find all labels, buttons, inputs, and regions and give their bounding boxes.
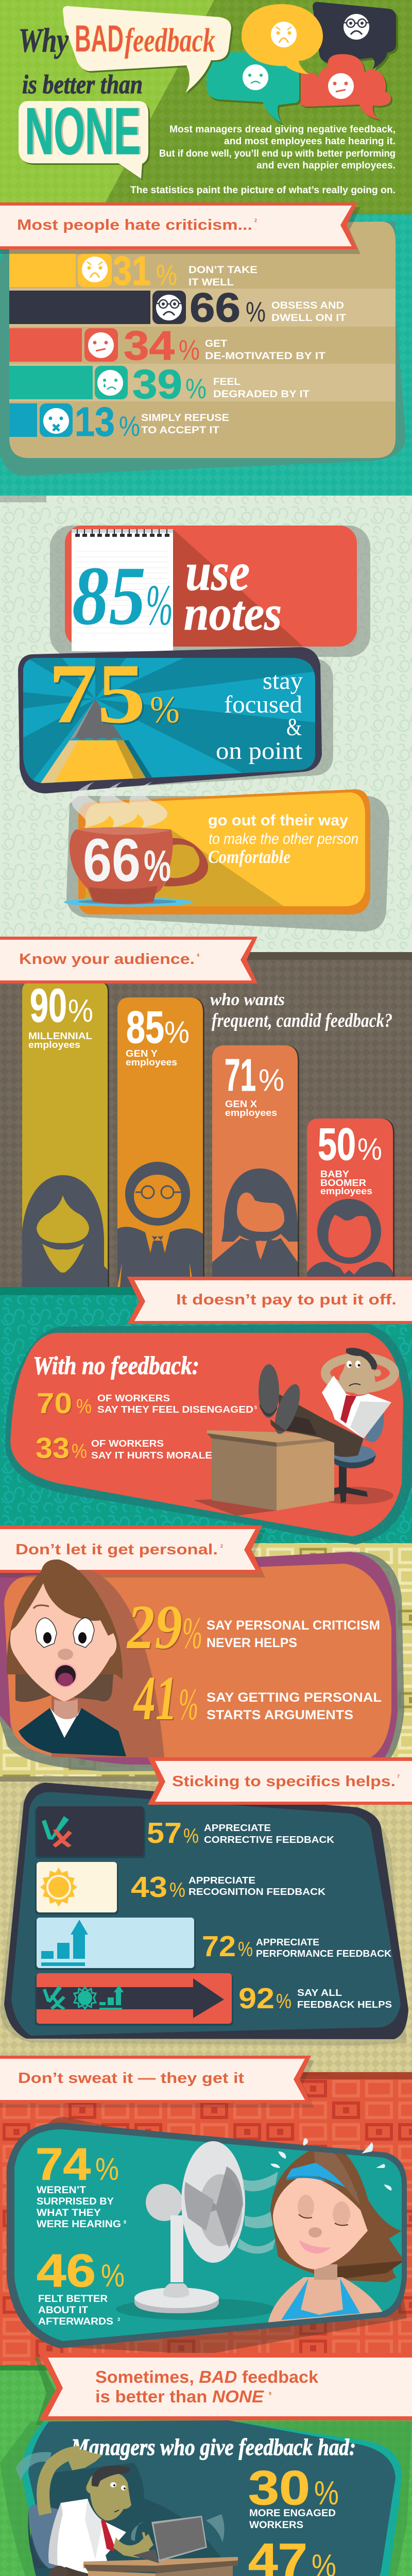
- row: 34 percent: [9, 323, 325, 368]
- column: gen x: [212, 1045, 299, 1287]
- title: BAD: [75, 18, 124, 60]
- section background: pale wallpaper: [0, 496, 412, 953]
- intro text: [130, 124, 396, 196]
- stat: 85 percent: 85: [72, 550, 146, 642]
- text: use notes: notes: [184, 586, 282, 640]
- stat: 30 percent: %: [314, 2474, 339, 2512]
- column: baby boomer: [307, 1118, 394, 1287]
- row: 31 percent: [9, 248, 258, 294]
- row: all feedback helps: FEEDBACK HELPS: [297, 1999, 392, 2010]
- banner: it doesn't pay to put it off: It doesn’t pay to put it off.: [176, 1292, 397, 1308]
- row: 39 percent: FEEL: [213, 377, 241, 387]
- stats: personal criticism: [126, 1592, 382, 1734]
- column: gen y: 85: [126, 1002, 164, 1053]
- stat: 46 percent: FELT BETTER: [38, 2294, 108, 2304]
- icon: teal bubble with sad face: [207, 52, 301, 126]
- row: corrective feedback: 57: [147, 1817, 182, 1850]
- stat: 74 percent: 8: [124, 2219, 126, 2225]
- column: millennial: %: [68, 993, 93, 1029]
- text: use notes: [184, 541, 282, 640]
- section background: header green: [0, 0, 412, 310]
- panel: 85 percent use notes: [50, 526, 370, 657]
- stat: 30 percent: MORE ENGAGED: [249, 2508, 336, 2519]
- row: 34 percent: GET: [205, 338, 227, 349]
- stat: 41 percent: SAY GETTING PERSONAL: [207, 1690, 382, 1705]
- panel: criticism statistics: [0, 222, 406, 476]
- row: 39 percent: %: [185, 372, 207, 404]
- icon: pencil: [41, 699, 152, 783]
- stat: 75 percent: %: [150, 689, 180, 731]
- banner: don't sweat it: [0, 2056, 314, 2108]
- row: all feedback helps: [35, 1973, 392, 2026]
- banner: don't let it get personal: Don’t let it get personal.: [15, 1541, 218, 1558]
- column: millennial: MILLENNIAL: [28, 1031, 92, 1041]
- column: gen y: employees: [126, 1057, 177, 1067]
- text: stay focused and on point: stay: [263, 667, 303, 694]
- column: gen y: %: [164, 1015, 190, 1049]
- banner: it doesn't pay to put it off: [127, 1277, 412, 1324]
- intro text: The statistics paint the picture of what’s really going on.: [130, 185, 396, 196]
- stat: 41 percent: 41: [133, 1664, 177, 1733]
- stat: 74 percent: [36, 2139, 126, 2230]
- panel: managers who give feedback: [0, 2420, 412, 2576]
- banner: sticking to specifics: [148, 1757, 412, 1805]
- column: baby boomer: BABY: [320, 1169, 349, 1179]
- stat: 74 percent: WEREN’T: [37, 2185, 86, 2196]
- stat: 74 percent: SURPRISED BY: [37, 2196, 114, 2207]
- row: recognition feedback: APPRECIATE: [188, 1875, 255, 1886]
- row: 13 percent: TO ACCEPT IT: [141, 425, 219, 436]
- title bubble: NONE: [19, 94, 150, 180]
- panel: 66 percent go out of their way: [64, 782, 389, 931]
- section background: brown: [0, 952, 412, 1288]
- row: 66 percent: OBSESS AND: [271, 300, 344, 311]
- row: recognition feedback: 43: [131, 1871, 167, 1904]
- stat: 46 percent: 3: [117, 2317, 120, 2322]
- row: corrective feedback: %: [183, 1825, 199, 1848]
- stat: 46 percent: %: [101, 2258, 125, 2294]
- illustration: man at laptop: [15, 2449, 253, 2576]
- banner: know your audience: 4: [197, 953, 199, 958]
- stat: 41 percent: 41: [134, 1665, 178, 1734]
- row: 31 percent: DON’T TAKE: [188, 265, 258, 276]
- stat: 29 percent: [126, 1592, 380, 1663]
- row: 66 percent: 66: [190, 284, 241, 330]
- banner: sticking to specifics: 7: [397, 1774, 400, 1779]
- row: performance feedback: %: [238, 1938, 253, 1961]
- stat: 29 percent: NEVER HELPS: [207, 1636, 297, 1650]
- title bubble: cream: [63, 6, 233, 94]
- banner: sometimes bad feedback: 9: [269, 2391, 271, 2396]
- row: all feedback helps: %: [276, 1990, 291, 2013]
- column: baby boomer: %: [357, 1132, 382, 1166]
- row: 13 percent: %: [119, 410, 140, 442]
- heading: who wants frequent candid feedback: [210, 990, 392, 1031]
- text: go out of their way: to make the other person: [209, 831, 358, 848]
- row: 39 percent: [9, 361, 310, 407]
- banner: know your audience: [0, 937, 258, 984]
- stat: 46 percent: AFTERWARDS: [38, 2316, 113, 2327]
- section background: yellow squares: [0, 1543, 412, 1777]
- section background: teal criticism: [0, 214, 412, 497]
- illustration: man with feet on desk: [194, 1348, 394, 1516]
- stat: 47 percent: [248, 2534, 336, 2576]
- stat: 70 percent: 5: [254, 1405, 257, 1410]
- stat: 70 percent: SAY THEY FEEL DISENGAGED: [97, 1404, 253, 1415]
- row: 31 percent: 31: [113, 248, 151, 294]
- title: feedback: [125, 22, 215, 59]
- row: corrective feedback: CORRECTIVE FEEDBACK: [204, 1835, 334, 1845]
- stat: 30 percent: WORKERS: [249, 2520, 303, 2531]
- icon: coffee mug: 66: [83, 826, 141, 894]
- title: Why: [19, 22, 69, 59]
- stat: 70 percent: 70: [37, 1387, 72, 1420]
- row: all feedback helps: 92: [238, 1982, 274, 2015]
- column: gen x: %: [259, 1063, 284, 1097]
- column: millennial: 90: [30, 979, 67, 1032]
- row: 31 percent: %: [156, 259, 177, 292]
- title: is better than: [22, 70, 143, 99]
- icon: spiral notepad: [72, 529, 173, 651]
- row: 13 percent: SIMPLY REFUSE: [141, 413, 229, 423]
- stat: 46 percent: [37, 2245, 125, 2327]
- intro text: and most employees hate hearing it.: [224, 136, 396, 147]
- banner: don't let it get personal: 2: [220, 1544, 223, 1549]
- stat: 33 percent: 33: [37, 1433, 71, 1466]
- panel: don't let it get personal: [0, 1552, 404, 1771]
- stat: 70 percent: [37, 1387, 257, 1421]
- stat: 41 percent: [133, 1664, 382, 1734]
- section background: bright green: [0, 2365, 412, 2576]
- column: millennial: employees: [28, 1040, 80, 1050]
- stat: 33 percent: 33: [36, 1432, 70, 1465]
- stat: 33 percent: 6: [214, 1449, 217, 1454]
- stat: 29 percent: 29: [126, 1592, 182, 1662]
- banner: sometimes bad feedback: Sometimes, BAD feedback: [95, 2367, 319, 2386]
- illustration: relaxed woman with headband: [268, 2141, 404, 2324]
- banner: sticking to specifics: Sticking to specifics helps.: [172, 1773, 396, 1790]
- row: recognition feedback: [35, 1862, 325, 1914]
- stat: 75 percent: 75: [50, 648, 147, 742]
- stat: 70 percent: OF WORKERS: [97, 1393, 170, 1403]
- text: go out of their way: go out of their way: [208, 812, 348, 829]
- banner: know your audience: Know your audience.: [19, 951, 195, 968]
- row: 66 percent: %: [246, 296, 266, 328]
- banner: most people hate criticism: Most people hate criticism...: [17, 217, 252, 233]
- banner: don't sweat it: Don’t sweat it — they get it: [18, 2070, 244, 2087]
- stat: 74 percent: WHAT THEY: [37, 2208, 101, 2218]
- row: corrective feedback: APPRECIATE: [204, 1823, 271, 1833]
- stat: 46 percent: 46: [37, 2245, 96, 2297]
- banner: sometimes bad feedback: is better than NONE: [95, 2387, 264, 2406]
- row: 31 percent: IT WELL: [188, 277, 234, 288]
- column: gen x: 71: [225, 1049, 256, 1100]
- stat: 29 percent: %: [182, 1608, 202, 1658]
- text: stay focused and on point: on point: [216, 737, 303, 765]
- stat: 41 percent: STARTS ARGUMENTS: [207, 1708, 353, 1722]
- stat: 75 percent: %: [151, 690, 181, 732]
- row: performance feedback: [35, 1918, 391, 1970]
- row: 34 percent: %: [179, 334, 200, 366]
- column: gen y: GEN Y: [126, 1048, 158, 1059]
- stat: 70 percent: %: [76, 1396, 92, 1418]
- row: performance feedback: 72: [202, 1930, 236, 1963]
- stat: 74 percent: %: [95, 2151, 119, 2187]
- text: go out of their way: Comfortable: [208, 846, 290, 867]
- row: performance feedback: PERFORMANCE FEEDBACK: [256, 1948, 391, 1959]
- stat: 70 percent: 70: [38, 1388, 73, 1421]
- heading: with no feedback: With no feedback:: [33, 1351, 199, 1380]
- panel: with no feedback: [5, 1324, 412, 1545]
- illustration: desk fan: [116, 2141, 278, 2320]
- text: go out of their way: [208, 812, 358, 867]
- banner: most people hate criticism: [0, 202, 360, 254]
- title bubble: NONE: NONE: [26, 94, 142, 168]
- row: 39 percent: 39: [132, 361, 182, 407]
- section background: red squares: [0, 2072, 412, 2366]
- row: 13 percent: 13: [75, 399, 115, 445]
- panel: don't sweat it: [7, 2117, 407, 2354]
- icon: sweat drops: [270, 2138, 391, 2191]
- text: use notes: use: [185, 541, 250, 602]
- icon: steam: [72, 782, 167, 828]
- row: 66 percent: [9, 284, 346, 330]
- section background: khaki: [0, 1776, 412, 2072]
- column: gen x: employees: [225, 1108, 277, 1118]
- column: millennial: [22, 979, 109, 1288]
- icon: yellow bubble with angry face: [242, 4, 323, 74]
- stat: 74 percent: WERE HEARING: [37, 2219, 121, 2230]
- icon: coffee mug: %: [144, 842, 171, 891]
- row: corrective feedback: [35, 1806, 334, 1858]
- stat: 41 percent: %: [179, 1679, 198, 1729]
- stat: 85 percent: %: [146, 573, 173, 637]
- title bubble: NONE: NONE: [25, 94, 141, 168]
- intro text: Most managers dread giving negative feedback,: [169, 124, 396, 135]
- intro text: and even happier employees.: [256, 160, 396, 171]
- row: 13 percent: [9, 399, 229, 445]
- banner: sometimes bad feedback: [35, 2353, 412, 2425]
- banner: most people hate criticism: 2: [254, 218, 257, 223]
- icon: coffee mug: [64, 826, 208, 907]
- column: baby boomer: BOOMER: [320, 1178, 366, 1188]
- stat: 33 percent: %: [72, 1440, 87, 1463]
- heading: managers who give feedback had: Managers who give feedback had:: [71, 2434, 356, 2460]
- icon: coral cloud bubble with neutral face: [299, 54, 392, 121]
- text: stay focused and on point: focused: [224, 691, 302, 718]
- section background: teal wallpaper: [0, 1287, 412, 1545]
- row: 39 percent: DEGRADED BY IT: [213, 389, 310, 400]
- text: stay focused and on point: [216, 667, 303, 765]
- stat: 33 percent: OF WORKERS: [91, 1438, 164, 1449]
- stat: 75 percent: [48, 646, 181, 742]
- illustration: shocked woman: [7, 1560, 164, 1757]
- stat: 74 percent: 74: [36, 2139, 91, 2190]
- row: recognition feedback: %: [169, 1879, 185, 1902]
- stat: 75 percent: 75: [48, 646, 146, 741]
- panel: sticking to specifics: [0, 1775, 408, 2045]
- column: baby boomer: employees: [320, 1186, 372, 1196]
- column: gen y: [117, 997, 204, 1287]
- stat: 29 percent: SAY PERSONAL CRITICISM: [207, 1618, 380, 1633]
- row: 34 percent: DE-MOTIVATED BY IT: [205, 351, 325, 362]
- row: 66 percent: DWELL ON IT: [271, 313, 346, 324]
- stat: 46 percent: ABOUT IT: [38, 2305, 88, 2316]
- text: stay focused and on point: &: [286, 714, 302, 741]
- stat: 33 percent: SAY IT HURTS MORALE: [91, 1450, 212, 1461]
- row: performance feedback: APPRECIATE: [256, 1937, 319, 1947]
- heading: who wants frequent candid feedback: who wants: [210, 990, 285, 1009]
- stat: 30 percent: [248, 2461, 339, 2531]
- chart: generation columns: [22, 979, 394, 1288]
- intro text: But if done well, you’ll end up with better performing: [159, 148, 396, 159]
- row: recognition feedback: RECOGNITION FEEDBACK: [188, 1887, 325, 1897]
- banner: don't let it get personal: [0, 1526, 265, 1578]
- row: 34 percent: 34: [124, 323, 175, 368]
- stat: 30 percent: 30: [248, 2461, 310, 2515]
- column: gen x: GEN X: [225, 1099, 257, 1109]
- icon: dark speech bubble with glasses face: [313, 2, 398, 72]
- stat: 33 percent: [36, 1432, 217, 1466]
- row: all feedback helps: SAY ALL: [297, 1988, 342, 1998]
- title: [19, 18, 215, 99]
- stat: 29 percent: 29: [127, 1594, 183, 1663]
- panel: 75 percent stay focused: [15, 646, 333, 793]
- column: baby boomer: 50: [318, 1118, 356, 1170]
